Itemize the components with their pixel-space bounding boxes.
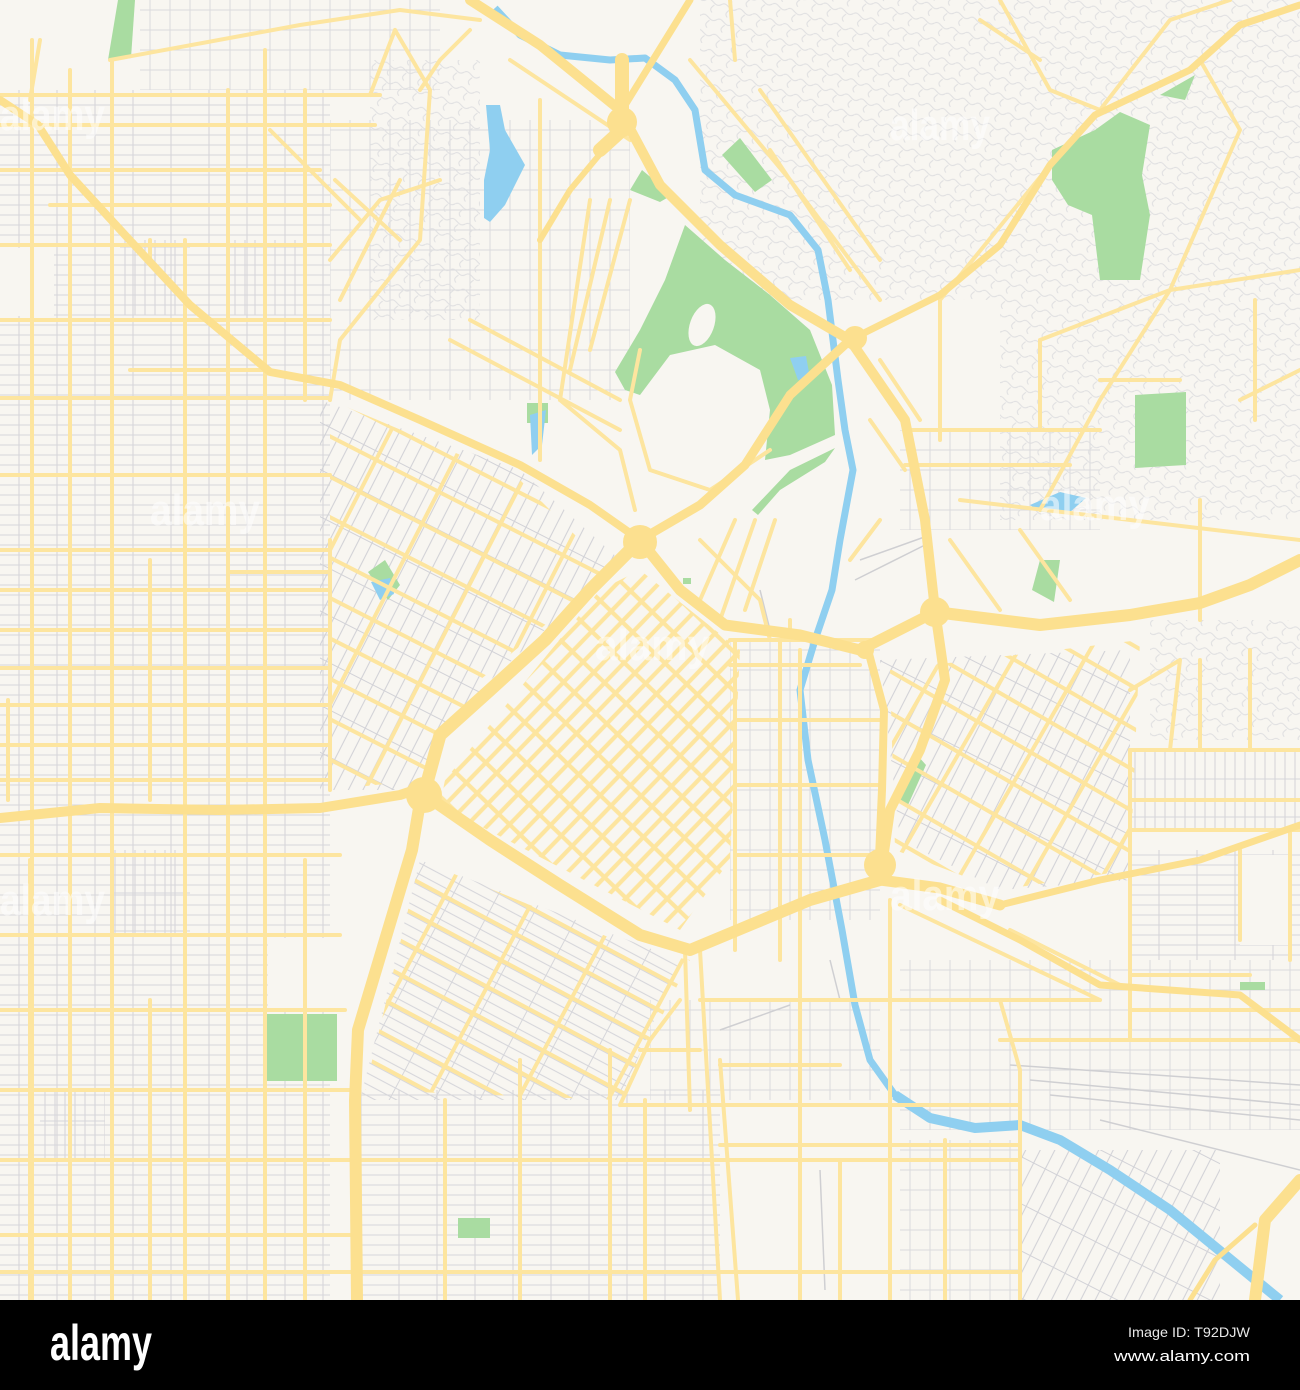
freeway: junction north xyxy=(600,60,622,150)
park: southeast xyxy=(1240,982,1265,990)
park: Echo Park edge xyxy=(527,403,548,423)
park: east block xyxy=(1135,392,1186,468)
river: lower wide channel xyxy=(895,1095,1280,1300)
watermark: northwest: alamy xyxy=(0,91,105,140)
west horizontal arterials xyxy=(0,95,400,1272)
westlake diagonal grid xyxy=(330,400,610,790)
park: river strip xyxy=(752,448,835,515)
footer bar xyxy=(0,1300,1300,1390)
watermark: north: alamy xyxy=(890,101,990,150)
freeway: San Bernardino xyxy=(935,560,1300,625)
south vertical arterials xyxy=(445,640,1130,1300)
lake: Echo Park xyxy=(530,410,546,455)
freeway: Santa Ana segment xyxy=(640,540,935,650)
south horizontal arterials xyxy=(360,640,1100,1272)
freeway: 110 northeast xyxy=(850,5,1300,340)
image id: Image ID: T92DJW xyxy=(1128,1324,1251,1340)
freeway: 10 to Pomona link xyxy=(880,880,1000,905)
freeway: Pomona east xyxy=(1000,825,1300,905)
lake: reservoir xyxy=(790,356,810,380)
freeway: Glendale spur xyxy=(540,130,620,240)
west vertical arterials xyxy=(8,40,330,1300)
freeway: Harbor xyxy=(355,790,422,1300)
south central diagonal grid xyxy=(365,860,690,1100)
freeway: 5 north xyxy=(470,0,850,340)
east grid xyxy=(900,750,1300,1070)
river: Los Angeles River xyxy=(495,8,1280,1300)
watermarks xyxy=(0,91,1150,925)
freeway: 10 south xyxy=(425,795,880,950)
park: MacArthur xyxy=(368,560,400,600)
watermark: southwest: alamy xyxy=(0,876,105,925)
freeway: 5 southeast xyxy=(940,900,1300,1040)
park: north river xyxy=(722,138,772,192)
freeway: southeast ramp xyxy=(1190,1225,1255,1300)
watermark: southeast: alamy xyxy=(890,871,1000,920)
northeast roads xyxy=(690,0,1300,750)
lake: Silver Lake xyxy=(484,105,525,222)
interchange blobs xyxy=(406,107,950,881)
website: www.alamy.com xyxy=(1113,1348,1250,1365)
park: Elysian Park xyxy=(615,225,835,460)
park: Hollenbeck xyxy=(896,756,926,805)
park: northwest strip xyxy=(108,0,135,60)
water bodies xyxy=(371,105,1086,600)
park: Ernest Debs xyxy=(1052,112,1150,280)
parks xyxy=(108,0,1265,1238)
inner park clearing xyxy=(683,300,721,350)
boyle heights grid xyxy=(890,640,1140,890)
freeway: southeast corner xyxy=(1255,1180,1300,1300)
watermark: centre: alamy xyxy=(595,621,710,670)
footer logo: alamy xyxy=(50,1315,152,1371)
freeway: downtown diagonal xyxy=(425,540,640,790)
park: tiny downtown xyxy=(683,578,691,584)
freeway: 5 south xyxy=(850,340,945,880)
watermark: west: alamy xyxy=(150,486,260,535)
park: Exposition green xyxy=(267,1014,337,1081)
freeway: 101 east link xyxy=(868,650,884,880)
central north roads xyxy=(330,30,790,640)
freeway: Hollywood northwest xyxy=(0,100,640,540)
Dodger Stadium lot xyxy=(644,352,768,484)
freeway: 2 north connector xyxy=(622,0,690,110)
freeway: Santa Monica / 10 west xyxy=(0,785,430,818)
lake: MacArthur xyxy=(371,578,394,600)
blank lots xyxy=(0,248,1288,1010)
park: Lincoln area xyxy=(1032,560,1060,602)
watermark: east: alamy xyxy=(1040,481,1150,530)
park: north small xyxy=(630,170,672,202)
park: hill corner xyxy=(1160,75,1195,100)
freeway: Arroyo to stadium xyxy=(640,340,850,540)
park: small south xyxy=(458,1218,490,1238)
lake: east xyxy=(1030,492,1086,512)
northwest roads xyxy=(30,10,480,300)
rail yards xyxy=(720,535,1300,1290)
downtown diagonal grid xyxy=(440,570,740,930)
